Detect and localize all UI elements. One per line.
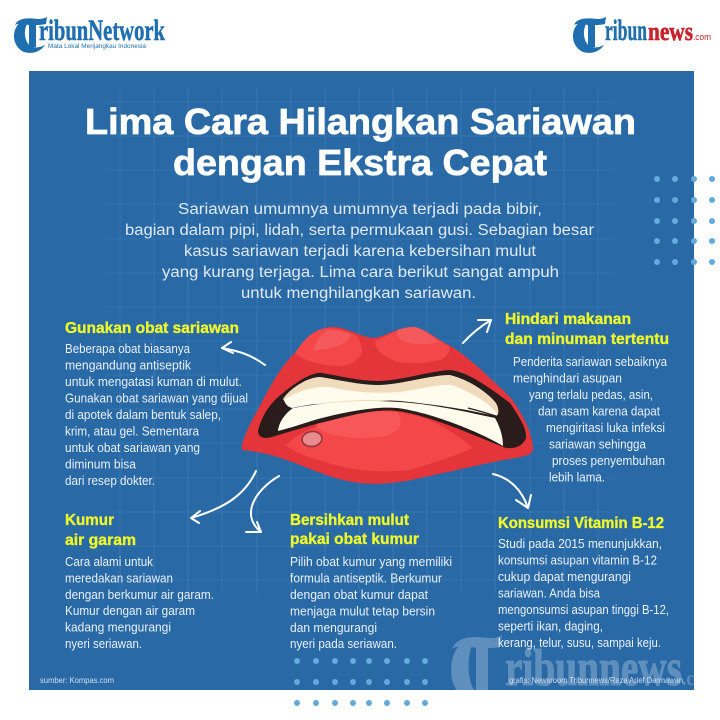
body text: proses penyembuhan [552, 453, 665, 468]
body text: nyeri seriawan. [65, 636, 142, 651]
heading [505, 311, 669, 348]
body text: seperti ikan, daging, [498, 618, 603, 634]
title [85, 101, 636, 183]
arrow: to Hindari makanan [463, 320, 491, 343]
section: Kumur air garam [65, 512, 214, 651]
title: dengan Ekstra Cepat [173, 142, 547, 183]
title: Lima Cara Hilangkan Sariawan [85, 101, 636, 142]
arrow: to Konsumsi Vitamin B-12 [493, 474, 531, 508]
logo: Tribunnews.com [573, 14, 711, 53]
body text: mengandung antiseptik [65, 358, 191, 372]
arrow: to Kumur air garam [191, 471, 256, 523]
intro text: yang kurang terjaga. Lima cara berikut sangat ampuh [162, 264, 559, 281]
body text: kadang mengurangi [65, 620, 171, 634]
watermark: Tribunnews: .c [682, 668, 694, 690]
section: Konsumsi Vitamin B-12 [498, 515, 669, 650]
heading: Bersihkan mulut [290, 512, 409, 529]
body text: nyeri pada seriawan. [290, 636, 397, 651]
body text: menghindari asupan [513, 370, 622, 386]
body text: krim, atau gel. Sementara [65, 424, 200, 438]
intro text: Sariawan umumnya umumnya terjadi pada bibir, [178, 201, 542, 218]
logo: TribunNetwork: ribunNetwork [39, 14, 165, 47]
body text: dan asam karena dapat [538, 404, 660, 418]
body text: kerang, telur, susu, sampai keju. [498, 635, 661, 650]
body text: yang terlalu pedas, asin, [529, 387, 653, 402]
heading [65, 512, 136, 549]
illustration: lips with mouth sore [242, 327, 533, 484]
section: Bersihkan mulut pakai obat kumur [290, 512, 452, 651]
body text: Pilih obat kumur yang memiliki [290, 554, 452, 569]
logo: Tribunnews.com: news [648, 17, 693, 46]
body text: lebih lama. [549, 470, 605, 484]
body text [65, 554, 214, 651]
body text: dengan berkumur air garam. [65, 587, 214, 602]
body text: cukup dapat mengurangi [498, 569, 631, 584]
body text: Cara alami untuk [65, 554, 153, 569]
heading: Konsumsi Vitamin B-12 [498, 515, 664, 532]
body text: dengan obat kumur dapat [290, 587, 428, 602]
panel: blue background [29, 71, 694, 690]
body text: diminum bisa [65, 456, 137, 472]
arrow: to Bersihkan mulut [246, 476, 279, 532]
body text: untuk obat sariawan yang [65, 440, 200, 455]
body text [513, 354, 668, 484]
intro text: kasus sariawan terjadi karena kebersihan mulut [184, 243, 537, 260]
arrow: to Gunakan obat sariawan [222, 342, 265, 365]
body text: di apotek dalam bentuk salep, [65, 407, 221, 422]
heading: Kumur [65, 512, 114, 529]
intro text: bagian dalam pipi, lidah, serta permukaan gusi. Sebagian besar [125, 222, 594, 239]
body text: formula antiseptik. Berkumur [290, 570, 443, 586]
body text: mengiritasi luka infeksi [546, 420, 665, 435]
body text: sariawan sehingga [549, 436, 647, 452]
heading: air garam [65, 532, 136, 549]
heading: pakai obat kumur [290, 531, 419, 548]
logo: Tribunnews.com: ribun [605, 14, 647, 47]
body text: sariawan. Anda bisa [498, 586, 601, 600]
dots: bottom pattern [294, 658, 428, 706]
logo: Tribunnews.com: .com [693, 32, 711, 42]
body text: dan mengurangi [290, 620, 377, 635]
intro text: untuk menghilangkan sariawan. [241, 285, 476, 302]
logo: TribunNetwork: Mata Lokal Menjangkau Indonesia [48, 43, 146, 50]
body text: untuk mengatasi kuman di mulut. [65, 374, 242, 389]
graphic credit: grafis: Newsroom Tribunnews/Reza Arief Darmawan [509, 676, 683, 685]
body text: Beberapa obat biasanya [65, 341, 191, 356]
body text: konsumsi asupan vitamin B-12 [498, 552, 657, 568]
dots: right pattern [654, 176, 715, 265]
heading [290, 512, 419, 548]
body text [498, 536, 669, 650]
body text: Kumur dengan air garam [65, 603, 195, 618]
body text: Gunakan obat sariawan yang dijual [65, 390, 248, 406]
body text [65, 341, 248, 488]
body text: Studi pada 2015 menunjukkan, [498, 536, 662, 551]
body text [290, 554, 452, 651]
body text: Penderita sariawan sebaiknya [513, 354, 668, 369]
body text: menjaga mulut tetap bersin [290, 604, 435, 618]
section: Hindari makanan dan minuman tertentu [505, 311, 669, 484]
heading: dan minuman tertentu [505, 331, 669, 348]
heading: Hindari makanan [505, 311, 631, 328]
body text: dari resep dokter. [65, 473, 155, 488]
logo: TribunNetwork [14, 14, 165, 53]
intro text [125, 201, 594, 302]
heading: Gunakan obat sariawan [65, 320, 239, 337]
source credit: sumber: Kompas.com [40, 676, 114, 685]
section: Gunakan obat sariawan [65, 320, 248, 488]
watermark: Tribunnews [451, 635, 694, 690]
body text: mengonsumsi asupan tinggi B-12, [498, 602, 669, 617]
body text: meredakan sariawan [65, 570, 173, 586]
